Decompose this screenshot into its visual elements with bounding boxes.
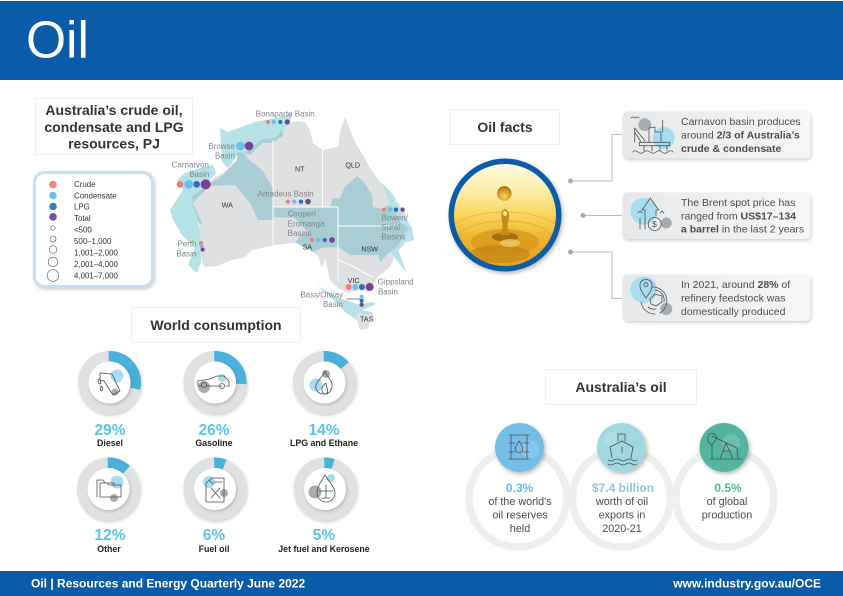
icon: flame [310, 370, 332, 394]
stat ring: production [676, 423, 774, 547]
donut: diesel: 29% [94, 422, 126, 439]
state labels: WA [222, 202, 233, 210]
map legend: Condensate [74, 192, 117, 200]
Tasmania [355, 314, 374, 330]
basin labels: Basins [288, 229, 312, 238]
basin resource dots [177, 119, 405, 307]
card text: Carnavon basin produces [681, 116, 801, 128]
stat ring: production: production [702, 510, 752, 522]
fact card: Brent price [622, 192, 810, 239]
stat ring: exports: $7.4 billion [592, 481, 654, 495]
icon: location and map [630, 276, 672, 315]
basin labels [172, 110, 414, 309]
stat ring: reserves [469, 423, 567, 547]
stat ring: reserves: held [510, 523, 530, 535]
icon: jerry can [203, 476, 228, 502]
icon: folder [97, 476, 124, 502]
icon: ship [597, 423, 646, 472]
donut: fuel oil: Fuel oil [199, 544, 229, 554]
card text: In 2021, around 28% of [681, 279, 790, 291]
header banner [0, 1, 843, 80]
basin labels: Eromanga [288, 219, 325, 228]
fact card: refinery feedstock [622, 274, 810, 321]
basin labels: Basin [176, 249, 196, 258]
basin labels: Browse [208, 142, 236, 151]
fact card: Brent price: ranged from US$17–134 [681, 210, 796, 222]
fact card: refinery feedstock: domestically produced [681, 306, 786, 318]
donut: LPG and ethane [290, 356, 358, 448]
basin labels: Carnarvon [172, 160, 209, 169]
donut: fuel oil: 6% [203, 527, 225, 544]
state labels: SA [303, 244, 312, 252]
stat ring: exports [572, 423, 670, 547]
donut: gasoline: Gasoline [195, 438, 233, 448]
basin labels: Bowen/ [381, 213, 409, 222]
stat ring: reserves: of the world's [488, 496, 552, 508]
fact card: Carnarvon [622, 112, 810, 158]
icon: price arrow: $ [652, 220, 657, 229]
state labels: VIC [348, 277, 360, 285]
basin labels: Cooper/ [288, 209, 317, 218]
map legend: 2,001–4,000 [74, 260, 118, 269]
stat ring: exports: 2020-21 [602, 523, 642, 535]
map of Australia [170, 110, 414, 330]
donut: fuel oil [189, 463, 241, 554]
card text: The Brent spot price has [681, 197, 795, 209]
heading: crude oil resources: Australia’s crude oil, [45, 102, 183, 118]
state labels: NT [295, 165, 305, 173]
heading: oil facts: Oil facts [477, 119, 533, 135]
donut: LPG and ethane: 14% [308, 422, 340, 439]
state labels: TAS [360, 316, 374, 324]
basin labels: Amadeus Basin [258, 189, 314, 198]
stat ring: reserves: oil reserves [492, 510, 548, 522]
icon: fuel nozzle [98, 370, 124, 396]
heading: world consumption: World consumption [150, 317, 282, 333]
interior basins, dark [192, 131, 408, 262]
connector lines [568, 134, 622, 298]
stat ring: exports: exports in [599, 510, 645, 522]
basin labels: Basin [378, 287, 398, 296]
donut: other [82, 463, 135, 554]
icon: pump jack [700, 423, 748, 472]
footer bar [0, 571, 843, 596]
title: Oil [26, 10, 89, 68]
map legend: LPG [74, 202, 90, 212]
basin labels: Basins [381, 233, 405, 242]
icon: price arrow [630, 198, 672, 230]
map legend: 500–1,000 [74, 237, 112, 246]
map legend: 1,001–2,000 [74, 248, 118, 258]
icon: oil barrel [495, 423, 544, 472]
basin labels: Basin [215, 152, 235, 161]
heading: world consumption [132, 308, 300, 342]
basin labels: Bonaparte Basin [256, 110, 315, 119]
footer bar: www.industry.gov.au/OCE [672, 576, 821, 590]
stat ring: production: of global [707, 496, 747, 508]
oil drop photo [447, 162, 563, 270]
donut: gasoline [189, 356, 241, 448]
map legend [34, 172, 152, 286]
state labels: QLD [345, 161, 360, 169]
fact card: Carnarvon: around 2/3 of Australia’s [681, 130, 800, 142]
landmass [192, 117, 410, 293]
fact card: Carnarvon: crude & condensate [681, 143, 782, 155]
basin labels: Bass/Otway [300, 290, 343, 299]
donut: LPG and ethane: LPG and Ethane [290, 438, 358, 448]
basin labels: Basin [189, 170, 209, 179]
basin labels: Surat [381, 223, 401, 232]
map legend: Crude [74, 180, 96, 189]
stat ring: reserves: 0.3% [506, 481, 534, 495]
heading: crude oil resources: condensate and LPG [44, 119, 184, 135]
donut: gasoline: 26% [198, 422, 230, 439]
heading: crude oil resources: resources, PJ [68, 136, 160, 152]
donut: jet fuel: 5% [313, 527, 335, 544]
map legend: 4,001–7,000 [74, 272, 118, 280]
donut: other: 12% [94, 527, 126, 544]
state borders [273, 140, 400, 281]
stat ring: production: 0.5% [714, 481, 742, 495]
fact card: Brent price: a barrel in the last 2 years [681, 224, 804, 236]
donut: other: Other [97, 544, 121, 554]
icon: offshore rig [631, 117, 675, 153]
basin labels: Perth [177, 240, 196, 249]
heading: Australia's oil: Australia’s oil [575, 379, 667, 395]
fact card: refinery feedstock: refinery feedstock was [681, 292, 785, 304]
footer bar: Oil | Resources and Energy Quarterly June 2022 [31, 576, 305, 590]
light offshore basins [170, 113, 293, 273]
state labels [222, 161, 378, 324]
map legend: Total [74, 214, 91, 223]
map legend: <500 [74, 226, 92, 234]
labels and dots [172, 110, 414, 324]
donut: jet fuel: Jet fuel and Kerosene [278, 544, 370, 554]
state labels: NSW [361, 245, 378, 253]
stat ring: exports: worth of oil [595, 496, 648, 508]
donut: jet fuel [278, 463, 370, 554]
icon: jet fuel drop [308, 474, 335, 502]
basin labels: Gippsland [378, 278, 414, 287]
heading: crude oil resources [36, 98, 192, 154]
donut: diesel [83, 356, 136, 448]
donut: diesel: Diesel [97, 438, 123, 448]
heading: oil facts [450, 110, 560, 144]
basin labels: Basin [323, 300, 343, 309]
icon: car [198, 374, 229, 393]
light coastal basins [317, 182, 414, 320]
heading: Australia's oil [546, 370, 696, 404]
